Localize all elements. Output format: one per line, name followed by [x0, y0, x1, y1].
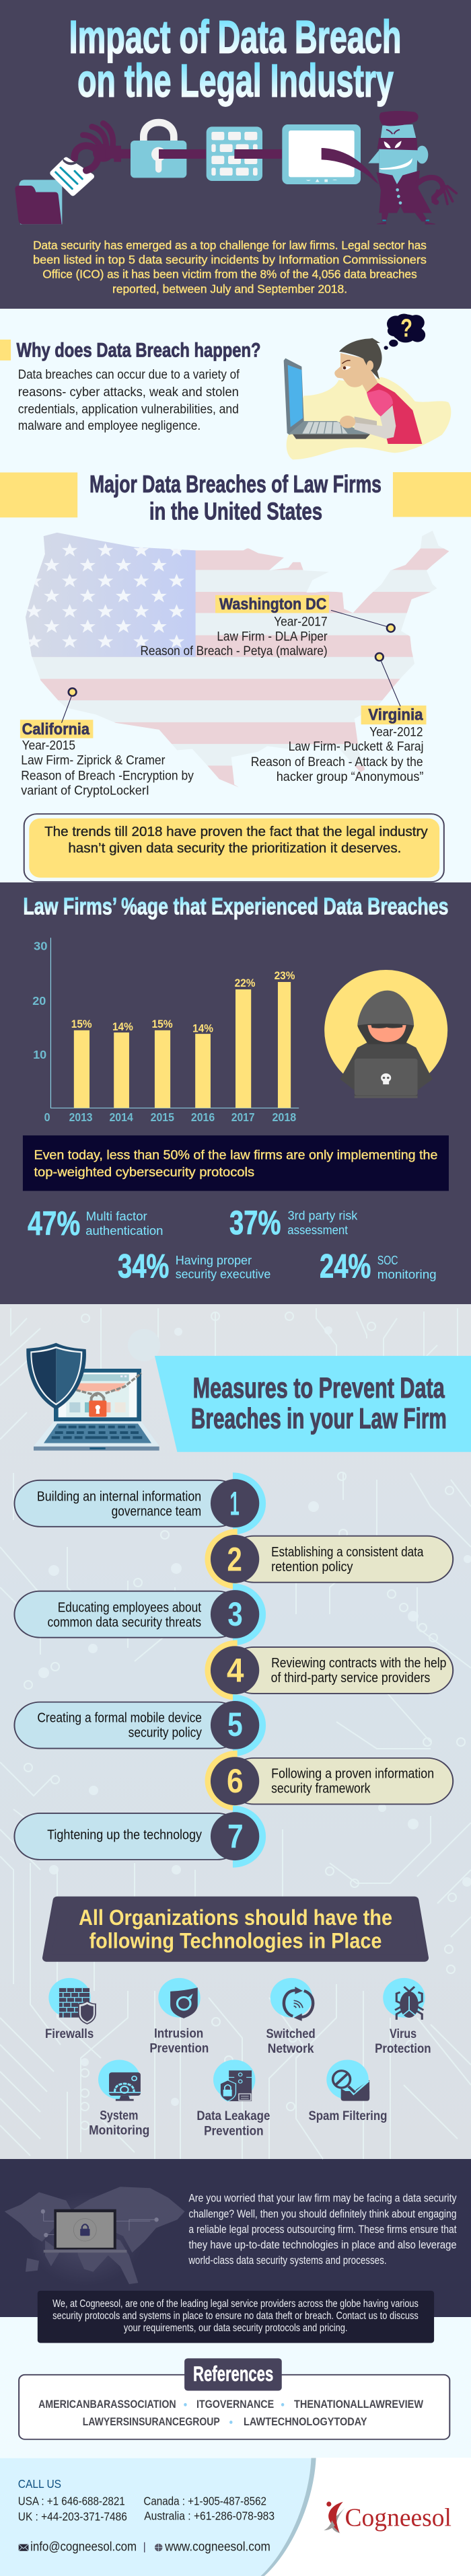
step 2: Establishing a consistent data [271, 1545, 424, 1560]
intro paragraph: reported, between July and September 2018. [112, 282, 347, 295]
callout: virginia: Reason of Breach - Attack by the [251, 755, 423, 769]
logo: cogneesol [324, 2501, 451, 2533]
bar chart: breaches by year: 15% [71, 1017, 92, 1030]
step 7: Tightening up the technology [47, 1828, 202, 1842]
step 2: 2 [227, 1541, 242, 1579]
map: united states in flag pattern [18, 527, 457, 793]
footer contact panel [0, 2458, 316, 2576]
icon: system monitoring [89, 2059, 149, 2137]
icon: system monitoring: System [100, 2108, 138, 2123]
callout: california: Law Firm- Ziprick & Cramer [21, 754, 166, 768]
intro paragraph: Office (ICO) as it has been victim from the 8% of the 4,056 data breaches [42, 268, 417, 280]
bar chart: breaches by year: 20 [32, 994, 46, 1008]
stat: 37 percent: assessment [287, 1223, 348, 1238]
step 4: of third-party service providers [271, 1671, 430, 1685]
heading accent bar [0, 340, 11, 361]
step 7: 7 [227, 1818, 244, 1856]
step 1: 1 [230, 1485, 240, 1523]
heading accent blocks [0, 472, 471, 517]
heading: major data breaches [89, 470, 382, 525]
intro paragraph: been listed in top 5 data security incidents by Information Commissioners [33, 254, 427, 266]
text block: are you worried: world-class data security systems and processes. [188, 2254, 387, 2267]
stat: 24 percent: 24% [320, 1248, 371, 1285]
callout: washington dc: Washington DC [219, 595, 326, 613]
panel: about cogneesol: your requirements, our data security protocols and pricing. [124, 2322, 348, 2334]
step 3: 3 [227, 1595, 243, 1634]
banner heading: measures to prevent data breaches [155, 1356, 471, 1452]
icon: data leakage prevention: Data Leakage [196, 2109, 270, 2123]
illustration: hand stealing a document from a folder [15, 122, 206, 224]
footer contact panel: Canada : +1-905-487-8562 [143, 2494, 266, 2508]
callout: fewer than half implement protocols: Even today, less than 50% of the law firms are only implementing the [34, 1147, 437, 1162]
bar chart: breaches by year: 2013 [69, 1110, 93, 1124]
step 2 [205, 1529, 453, 1589]
text block: are you worried [188, 2191, 457, 2267]
step 2: retention policy [271, 1560, 353, 1575]
step 3 [14, 1583, 266, 1646]
stat: 37 percent: 37% [229, 1205, 281, 1242]
callout: washington dc: Reason of Breach - Petya (malware) [140, 644, 328, 658]
stat: 37 percent: 3rd party risk [288, 1209, 357, 1223]
step 4: 4 [227, 1652, 244, 1690]
stat: 24 percent: SOC [377, 1254, 398, 1268]
illustration: shield and chained laptop [26, 1343, 159, 1451]
step 1 [14, 1472, 266, 1535]
panel: references: LAWYERSINSURANCEGROUP [83, 2416, 220, 2428]
logo: cogneesol: Cogneesol [345, 2503, 451, 2532]
icon: thought bubble with question mark: ? [400, 314, 412, 342]
text block: causes of breach: malware and employee negligence. [18, 418, 201, 433]
stat: 47 percent: 47% [28, 1205, 80, 1242]
footer contact panel: UK : +44-203-371-7486 [18, 2509, 127, 2523]
bar chart: breaches by year: 2015 [151, 1110, 174, 1124]
stat: 34 percent: 34% [118, 1248, 169, 1285]
callout: washington dc: Law Firm - DLA Piper [217, 630, 328, 644]
step 1: Building an internal information [37, 1489, 201, 1504]
stat: 47 percent [28, 1205, 163, 1242]
step 5: Creating a formal mobile device [37, 1710, 202, 1725]
step 5 [14, 1694, 266, 1756]
callout: virginia [251, 653, 426, 784]
icon: firewalls: Firewalls [45, 2026, 94, 2041]
callout: virginia: Virginia [368, 706, 423, 724]
panel: references: References [193, 2362, 273, 2386]
illustration: brick wall, tablet and masked thief [207, 111, 456, 225]
stat: 24 percent [320, 1248, 437, 1285]
step 6 [205, 1750, 453, 1811]
callout: fewer than half implement protocols [23, 1135, 449, 1191]
bar chart: breaches by year: 15% [151, 1017, 173, 1030]
icon: virus protection: Virus [390, 2026, 416, 2041]
icon: spam filtering: Spam Filtering [308, 2109, 387, 2123]
callout: california: California [22, 720, 90, 738]
icon: switched network [266, 1978, 316, 2056]
banner heading: technologies in place: All Organizations should have the [79, 1905, 392, 1930]
icon: virus protection: Protection [375, 2041, 431, 2056]
bar chart: breaches by year: 10 [33, 1048, 46, 1061]
stat: 47 percent: Multi factor [86, 1209, 147, 1223]
bar chart: breaches by year: 14% [112, 1020, 133, 1033]
bar chart: breaches by year: 2014 [110, 1110, 133, 1124]
callout: california: Year-2015 [22, 738, 75, 753]
panel: references: THENATIONALLAWREVIEW [294, 2398, 424, 2411]
stat: 24 percent: monitoring [377, 1268, 437, 1282]
footer contact panel: info@cogneesol.com [30, 2540, 137, 2554]
banner heading: technologies in place [46, 1900, 425, 1958]
icon: data leakage prevention [196, 2059, 270, 2138]
callout: industry trend statement: The trends till 2018 have proven the fact that the legal industry [44, 824, 428, 839]
heading: major data breaches: in the United States [149, 498, 322, 525]
icon: intrusion prevention: Intrusion [154, 2026, 203, 2041]
callout: industry trend statement: hasn’t given data security the prioritization it deserves. [68, 840, 401, 856]
step 3: common data security threats [48, 1615, 201, 1630]
bar chart: breaches by year: 23% [275, 969, 295, 982]
icon: intrusion prevention [149, 1978, 209, 2055]
panel: references: ITGOVERNANCE [196, 2398, 274, 2411]
icon: virus protection [375, 1978, 431, 2056]
bar chart: breaches by year: 2018 [272, 1110, 296, 1124]
step 1: governance team [112, 1504, 201, 1519]
footer contact panel: www.cogneesol.com [164, 2540, 270, 2554]
stat: 37 percent [229, 1205, 357, 1242]
illustration: man at a laptop [284, 338, 451, 459]
banner heading: technologies in place: following Technologies in Place [89, 1929, 382, 1953]
bar chart: breaches by year: 30 [34, 939, 48, 952]
icon: firewalls [45, 1978, 96, 2041]
icon: switched network: Network [268, 2041, 314, 2056]
step 3: Educating employees about [58, 1600, 201, 1615]
footer contact panel: Australia : +61-286-078-983 [144, 2509, 275, 2522]
title [69, 11, 401, 107]
icon: thought bubble with question mark [384, 314, 425, 350]
stat: 34 percent: Having proper [176, 1254, 252, 1268]
illustration: laptop lock over world map [5, 2187, 185, 2285]
footer contact panel: CALL US [18, 2477, 61, 2491]
step 7 [14, 1805, 266, 1868]
step 4 [205, 1640, 453, 1700]
stat: 47 percent: authentication [85, 1224, 163, 1238]
footer contact panel: USA : +1 646-688-2821 [18, 2494, 125, 2508]
step 6: Following a proven information [271, 1766, 434, 1781]
text block: causes of breach: credentials, application vulnerabilities, and [18, 402, 239, 416]
callout: virginia: Law Firm- Puckett & Faraj [289, 740, 423, 754]
callout: fewer than half implement protocols: top-weighted cybersecurity protocols [34, 1165, 254, 1180]
stat: 34 percent [118, 1248, 270, 1285]
step 6: 6 [227, 1762, 244, 1800]
icon: intrusion prevention: Prevention [149, 2041, 209, 2055]
intro paragraph: Data security has emerged as a top challenge for law firms. Legal sector has [33, 239, 427, 252]
illustration: hooded hacker at a laptop [324, 970, 447, 1098]
callout: industry trend statement [24, 814, 444, 882]
step 5: security policy [129, 1725, 202, 1740]
bar chart: breaches by year: 14% [192, 1022, 213, 1034]
panel: references: LAWTECHNOLOGYTODAY [244, 2416, 367, 2428]
icon: data leakage prevention: Prevention [204, 2123, 264, 2138]
panel: references: AMERICANBARASSOCIATION [38, 2398, 176, 2411]
bar chart: breaches by year: 0 [44, 1110, 50, 1124]
bar chart: breaches by year [32, 938, 299, 1124]
bar chart: breaches by year: 2017 [231, 1110, 255, 1124]
stat: 34 percent: security executive [176, 1267, 270, 1281]
icon: system monitoring: Monitoring [89, 2123, 149, 2137]
heading: why does data breach happen: Why does Data Breach happen? [17, 339, 261, 361]
icon: spam filtering [308, 2059, 387, 2123]
callout: washington dc [140, 595, 395, 658]
text block: causes of breach [18, 367, 240, 433]
panel: references [19, 2358, 449, 2439]
callout: washington dc: Year-2017 [274, 615, 328, 629]
bar chart: breaches by year: 22% [235, 977, 256, 989]
text block: causes of breach: Data breaches can occur due to a variety of [18, 367, 240, 382]
callout: california: Reason of Breach -Encryption by [21, 769, 194, 783]
callout: california: variant of CryptoLockerI [21, 784, 149, 798]
text block: causes of breach: reasons- cyber attacks, weak and stolen [18, 385, 239, 400]
callout: virginia: Year-2012 [369, 725, 423, 739]
icon: switched network: Switched [266, 2026, 316, 2041]
callout: california [20, 688, 194, 798]
intro paragraph [33, 239, 427, 295]
bar chart: breaches by year: 2016 [191, 1110, 215, 1124]
step 6: security framework [271, 1781, 371, 1796]
panel: about cogneesol [38, 2291, 434, 2343]
callout: virginia: hacker group “Anonymous” [277, 770, 423, 784]
step 5: 5 [227, 1706, 243, 1744]
